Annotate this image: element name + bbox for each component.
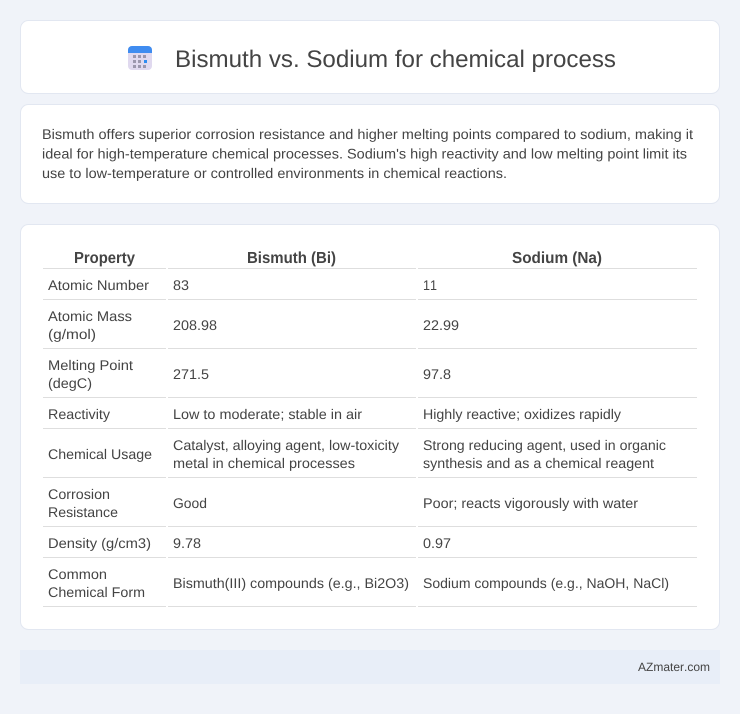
row: common chemical form: Sodium compounds (e.g., NaOH, NaCl) xyxy=(423,575,669,591)
footer bar xyxy=(20,650,720,684)
row: melting point: 271.5 xyxy=(173,366,209,382)
row: common chemical form: Bismuth(III) compounds (e.g., Bi2O3) xyxy=(173,575,409,591)
row: common chemical form: Common xyxy=(48,566,107,582)
row: corrosion resistance: Corrosion xyxy=(48,486,110,502)
row: atomic mass: Atomic Mass xyxy=(48,308,132,324)
row: reactivity xyxy=(48,406,621,422)
row: atomic number: 83 xyxy=(173,277,189,293)
table header row: Property xyxy=(74,250,135,267)
row: atomic number: Atomic Number xyxy=(48,277,149,293)
summary text: ideal for high-temperature chemical processes. Sodium's high reactivity and low melting point limit its xyxy=(42,146,687,162)
row: density: 9.78 xyxy=(173,535,201,551)
row: corrosion resistance: Good xyxy=(173,495,207,511)
row: chemical usage: Catalyst, alloying agent, low-toxicity xyxy=(173,437,399,453)
row: atomic mass: (g/mol) xyxy=(48,326,96,342)
row: atomic number xyxy=(48,277,437,293)
row: atomic number: 11 xyxy=(423,277,437,293)
row: density: 0.97 xyxy=(423,535,451,551)
row: corrosion resistance: Poor; reacts vigorously with water xyxy=(423,495,638,511)
title: Bismuth vs. Sodium for chemical process xyxy=(175,46,616,73)
row: corrosion resistance xyxy=(48,486,638,520)
row: chemical usage: metal in chemical processes xyxy=(173,455,355,471)
table rules xyxy=(43,268,697,606)
row: chemical usage xyxy=(48,437,666,471)
summary text: Bismuth offers superior corrosion resistance and higher melting points compared to sodium, making it xyxy=(42,126,693,142)
comparison table card xyxy=(20,224,720,630)
summary text: use to low-temperature or controlled environments in chemical reactions. xyxy=(42,165,507,181)
row: common chemical form xyxy=(48,566,669,600)
row: melting point: Melting Point xyxy=(48,357,133,373)
table header row: Sodium (Na) xyxy=(512,250,602,267)
icon: calendar xyxy=(128,46,152,70)
row: chemical usage: Strong reducing agent, used in organic xyxy=(423,437,666,453)
row: melting point: (degC) xyxy=(48,375,92,391)
row: density xyxy=(48,535,451,551)
summary card xyxy=(20,104,720,204)
table header row: Bismuth (Bi) xyxy=(247,250,336,267)
table header row xyxy=(74,250,602,267)
row: density: Density (g/cm3) xyxy=(48,535,151,551)
row: reactivity: Reactivity xyxy=(48,406,110,422)
row: reactivity: Highly reactive; oxidizes rapidly xyxy=(423,406,621,422)
header card xyxy=(20,20,720,94)
footer source label: AZmater.com xyxy=(638,660,710,674)
summary text xyxy=(42,126,693,181)
row: chemical usage: synthesis and as a chemical reagent xyxy=(423,455,654,471)
row: atomic mass xyxy=(48,308,459,342)
row: atomic mass: 22.99 xyxy=(423,317,459,333)
row: common chemical form: Chemical Form xyxy=(48,584,145,600)
row: corrosion resistance: Resistance xyxy=(48,504,118,520)
row: melting point: 97.8 xyxy=(423,366,451,382)
row: reactivity: Low to moderate; stable in air xyxy=(173,406,362,422)
row: chemical usage: Chemical Usage xyxy=(48,446,152,462)
row: atomic mass: 208.98 xyxy=(173,317,217,333)
row: melting point xyxy=(48,357,451,391)
